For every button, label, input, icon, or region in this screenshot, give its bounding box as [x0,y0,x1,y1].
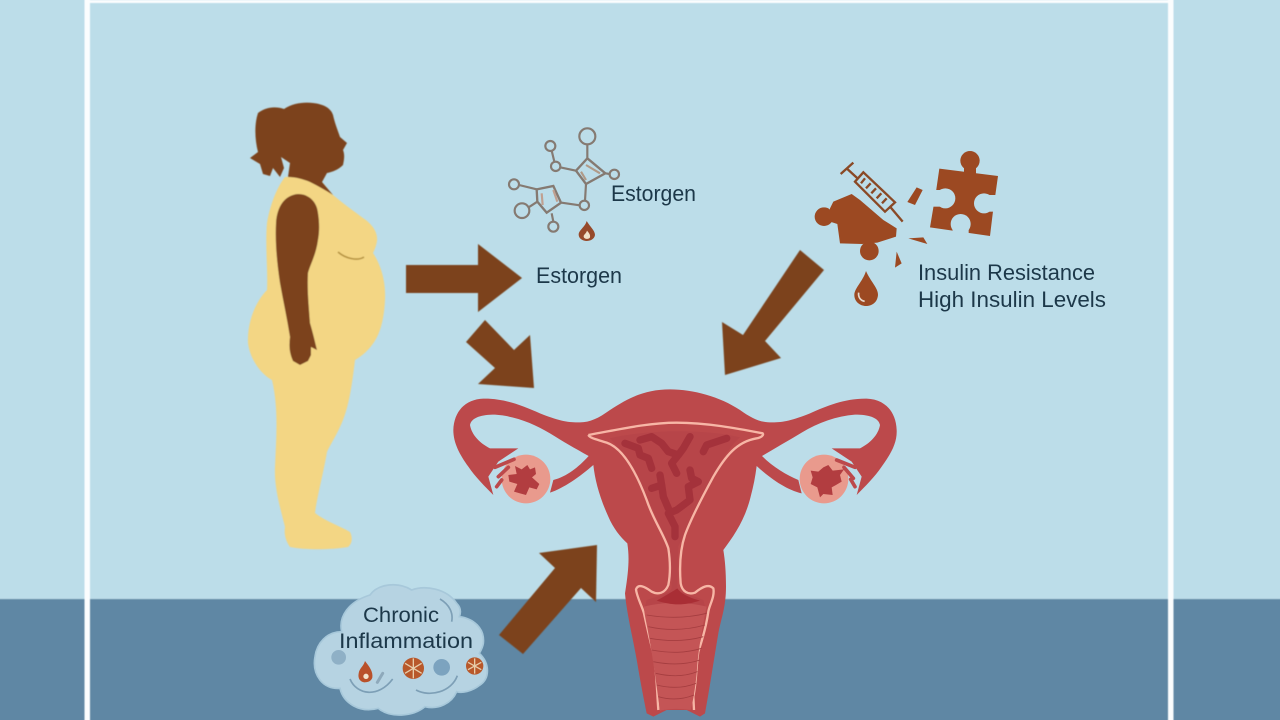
label: estrogen near molecule: Estorgen [611,181,696,206]
arrow: insulin to uterus [722,250,824,375]
right ovary base [800,455,848,503]
cell: orange right [466,657,483,675]
label: estrogen near arrow: Estorgen [536,263,622,288]
chronic inflammation cloud [314,585,487,715]
cell: blue [433,659,450,676]
endometrial vessels [625,437,727,537]
cloud contour lines [350,599,457,693]
label: insulin: Insulin Resistance [918,260,1095,285]
uterus and fallopian tubes [453,389,897,717]
uterine cavity shading [610,431,740,613]
cloud shape [314,585,487,715]
syringe [841,163,903,222]
right puzzle piece [928,151,1002,238]
cell: pale left [331,650,346,665]
left puzzle piece [815,194,897,260]
left ovary base [502,455,550,503]
uterus diagram [453,389,897,717]
label: inflammation: Inflammation [339,630,473,653]
label: chronic: Chronic [363,604,439,627]
cell: orange centre [403,658,424,679]
arrow: down to uterus [466,320,534,388]
flame [579,221,595,241]
arrow: woman to estrogen label [406,244,522,312]
vaginal canal rugae [644,588,707,711]
arrow: inflammation to uterus [499,545,597,654]
body silhouette [248,177,385,549]
label: high insulin: High Insulin Levels [918,287,1106,312]
insulin icons: syringe, puzzle pieces, shards and drop [815,151,1002,306]
right tube fimbriae [837,460,855,487]
arm [276,194,319,365]
flame [358,661,372,682]
left ovary follicle [508,465,539,495]
shards [907,187,923,205]
head and ponytail [250,103,347,195]
right ovary follicle [811,465,844,497]
thermometer small [377,673,383,682]
insulin drop [854,271,878,306]
estrogen molecule icon [509,128,619,241]
underbust line [338,252,364,259]
endometrial lining outline [588,423,763,710]
left tube fimbriae [495,459,514,487]
woman figure in profile [248,103,385,549]
